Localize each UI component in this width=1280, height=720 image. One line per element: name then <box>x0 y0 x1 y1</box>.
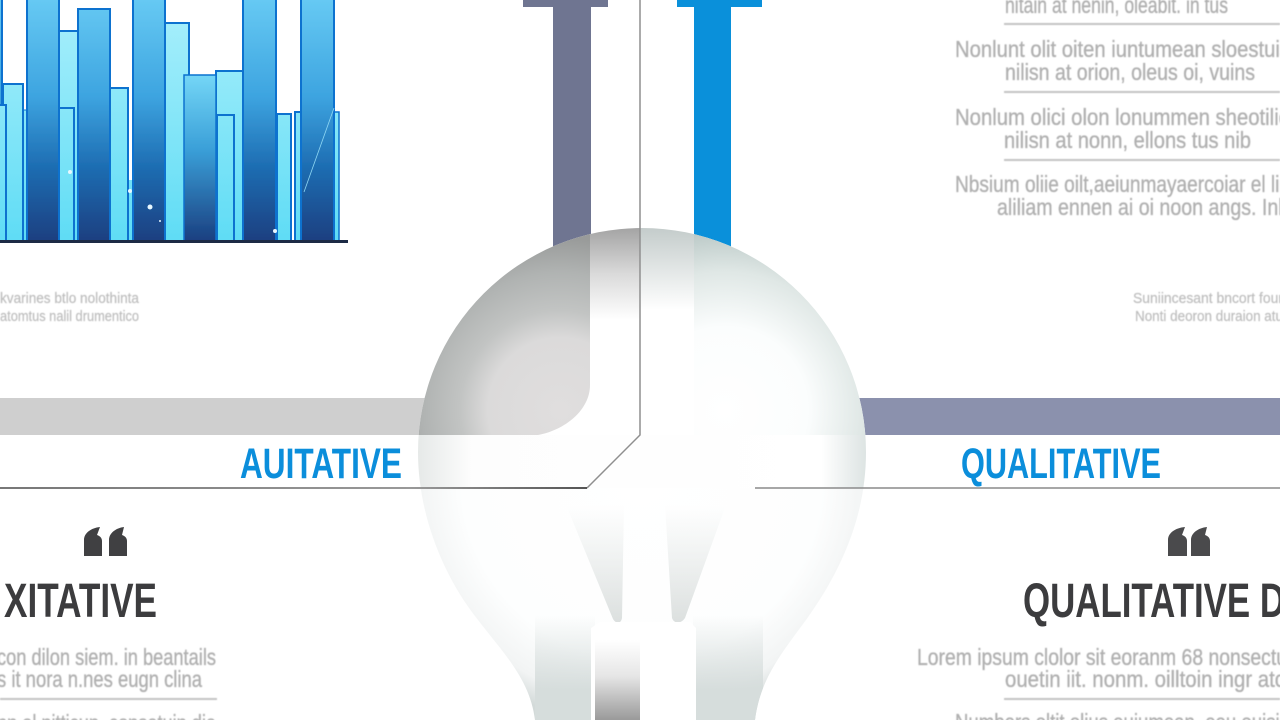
left lower text: s it nora n.nes eugn clina <box>0 666 202 692</box>
right text list <box>955 0 1280 220</box>
icon: right quote <box>1168 527 1210 556</box>
left chart caption: atomtus nalil drumentico <box>0 308 139 325</box>
right lower text <box>917 644 1280 720</box>
bulb socket <box>591 622 696 720</box>
right slate band <box>850 398 1280 435</box>
heading left: XITATIVE <box>4 575 157 628</box>
blue label left: AUITATIVE <box>240 440 402 488</box>
blue label right: QUALITATIVE <box>961 440 1161 488</box>
bulb upper right shade <box>694 234 866 435</box>
bulb upper left shade <box>418 234 590 435</box>
grey pillar <box>523 0 608 250</box>
bulb centre stripe <box>590 228 640 310</box>
filament wedges <box>579 536 714 622</box>
right chart caption <box>1133 290 1280 325</box>
bulb lower glass <box>400 488 880 720</box>
light bulb <box>400 220 880 720</box>
left lower text <box>0 644 217 720</box>
left chart caption <box>0 290 140 325</box>
blue pillar <box>677 0 762 250</box>
bar chart <box>0 0 339 241</box>
left lower text: con dilon siem. in beantails <box>0 644 216 670</box>
icon: left quote <box>84 527 127 556</box>
chart baseline <box>0 240 348 243</box>
circuit line <box>0 0 1280 488</box>
left grey band <box>0 398 430 435</box>
bulb neck shading <box>535 631 763 719</box>
chart sparkle highlights <box>68 108 334 233</box>
left chart caption: kvarines btlo nolothinta <box>0 290 140 307</box>
right text list: nilisn at nonn, ellons tus nib <box>1004 127 1251 153</box>
bulb horizontal band <box>410 435 870 488</box>
